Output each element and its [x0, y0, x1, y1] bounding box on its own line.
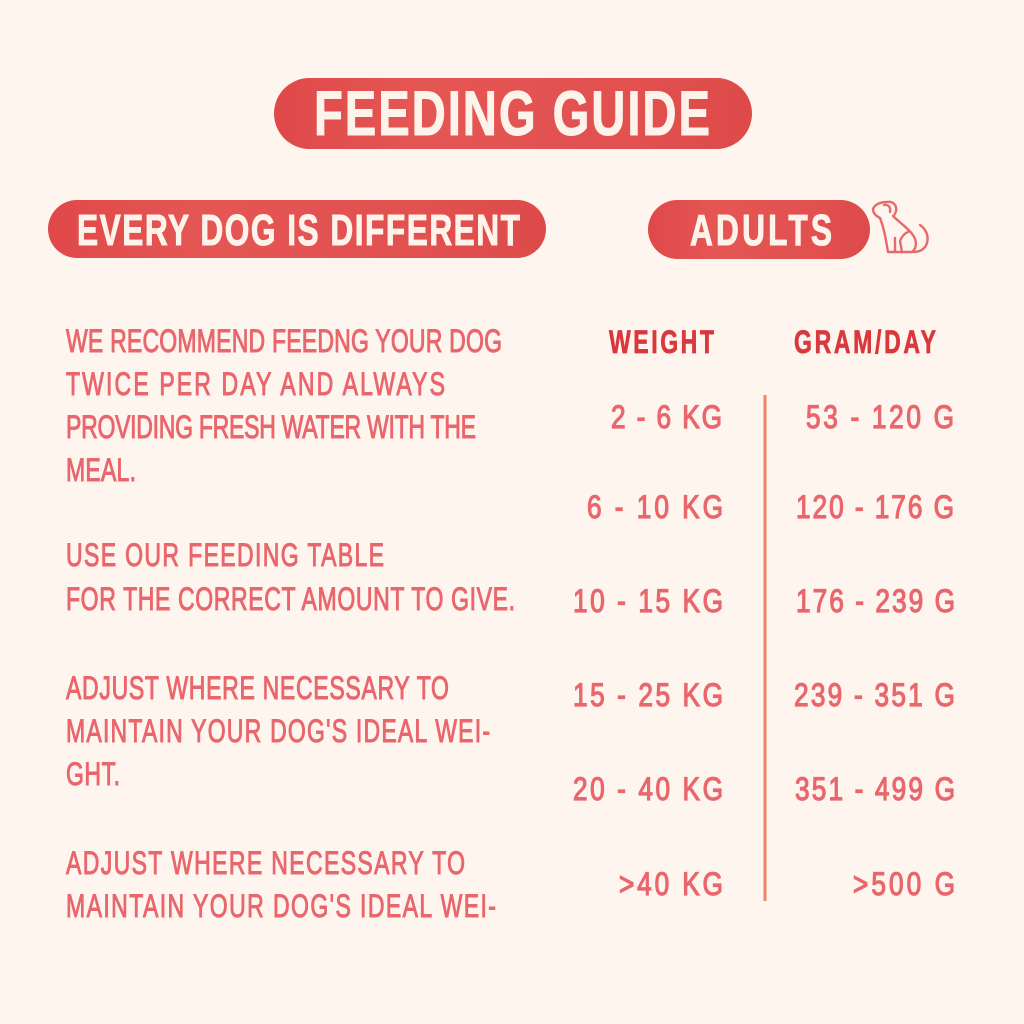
paragraph: adjust weight repeated: ADJUST WHERE NECESSARY TO: [66, 845, 465, 881]
title pill: FEEDING GUIDE: [314, 78, 710, 149]
feeding table: [573, 324, 955, 903]
text block: feeding advice: [66, 323, 515, 924]
column divider: [764, 395, 766, 901]
subtitle pill: adults: [648, 200, 870, 259]
paragraph: adjust weight: GHT.: [66, 756, 120, 792]
paragraph: feeding table: FOR THE CORRECT AMOUNT TO GIVE.: [66, 581, 515, 617]
row 5: 20 - 40 KG: [573, 773, 723, 808]
row 5: 351 - 499 G: [795, 773, 955, 808]
paragraph: feeding frequency: MEAL.: [66, 452, 136, 488]
paragraph: feeding frequency: PROVIDING FRESH WATER WITH THE: [66, 409, 476, 445]
row 2: 120 - 176 G: [796, 491, 954, 526]
row 3: 10 - 15 KG: [573, 585, 723, 620]
paragraph: adjust weight: [66, 670, 490, 792]
row 4: [573, 679, 955, 714]
paragraph: adjust weight: ADJUST WHERE NECESSARY TO: [66, 670, 449, 706]
paragraph: adjust weight repeated: [66, 845, 496, 924]
table header: gram per day: GRAM/DAY: [794, 324, 936, 360]
row 6: >500 G: [853, 868, 955, 903]
table header: weight: WEIGHT: [609, 324, 714, 360]
paragraph: feeding frequency: [66, 323, 502, 488]
paragraph: adjust weight repeated: MAINTAIN YOUR DOG'S IDEAL WEI-: [66, 888, 496, 924]
row 5: [573, 773, 955, 808]
icon: sitting dog: [873, 202, 928, 252]
row 1: [611, 401, 954, 436]
subtitle pill: every dog is different: EVERY DOG IS DIFFERENT: [77, 206, 520, 255]
row 4: 15 - 25 KG: [573, 679, 723, 714]
row 1: 2 - 6 KG: [611, 401, 722, 436]
row 1: 53 - 120 G: [806, 401, 954, 436]
paragraph: feeding table: [66, 537, 515, 617]
row 3: 176 - 239 G: [796, 585, 955, 620]
paragraph: adjust weight: MAINTAIN YOUR DOG'S IDEAL WEI-: [66, 713, 490, 749]
row 2: [587, 491, 954, 526]
row 3: [573, 585, 955, 620]
row 4: 239 - 351 G: [794, 679, 955, 714]
paragraph: feeding table: USE OUR FEEDING TABLE: [66, 537, 384, 573]
paragraph: feeding frequency: WE RECOMMEND FEEDNG YOUR DOG: [66, 323, 502, 359]
row 2: 6 - 10 KG: [587, 491, 723, 526]
row 6: >40 KG: [619, 868, 723, 903]
row 6: [619, 868, 955, 903]
subtitle pill: adults: ADULTS: [690, 206, 832, 255]
paragraph: feeding frequency: TWICE PER DAY AND ALWAYS: [66, 366, 445, 402]
